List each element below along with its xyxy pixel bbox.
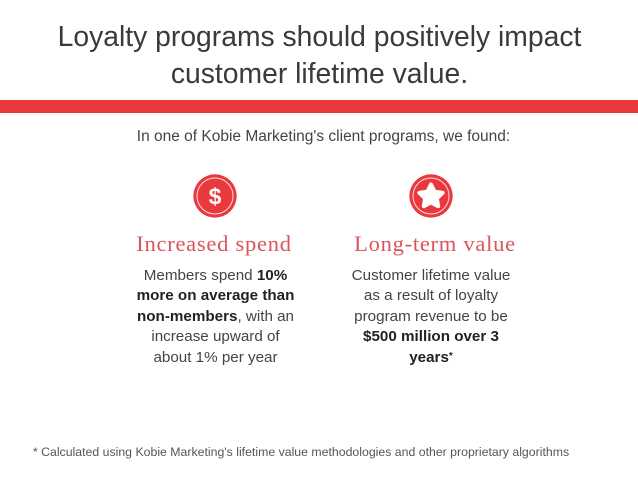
icon: dollar coin: $ [209, 184, 222, 210]
panel: increased spend [136, 231, 294, 366]
icon: dollar coin [193, 174, 237, 218]
red divider band [0, 100, 638, 113]
body text: long-term value: as a result of loyalty [364, 287, 498, 304]
body text: long-term value: $500 million over 3 [363, 328, 499, 345]
body text: increased spend [137, 267, 294, 366]
body text: long-term value: Customer lifetime value [352, 267, 510, 284]
heading: increased spend: Increased spend [136, 231, 292, 256]
body text: increased spend: more on average than [137, 287, 294, 304]
body text: increased spend: non-members, with an [137, 308, 294, 325]
heading: long-term value: Long-term value [354, 231, 516, 256]
title [58, 20, 582, 89]
body text: increased spend: Members spend 10% [144, 267, 287, 284]
panel: long-term value [352, 231, 516, 366]
title: Loyalty programs should positively impact [58, 20, 581, 52]
body text: long-term value: program revenue to be [354, 308, 508, 325]
intro text: In one of Kobie Marketing's client programs, we found: [137, 128, 510, 144]
body text: long-term value [352, 267, 510, 366]
title: customer lifetime value. [171, 57, 468, 89]
body text: long-term value: years* [409, 349, 453, 366]
body text: increased spend: about 1% per year [153, 349, 278, 366]
footnote: * Calculated using Kobie Marketing's lifetime value methodologies and other proprietary algorithms [33, 445, 569, 459]
icon: star coin [409, 174, 453, 218]
body text: increased spend: increase upward of [151, 328, 280, 345]
